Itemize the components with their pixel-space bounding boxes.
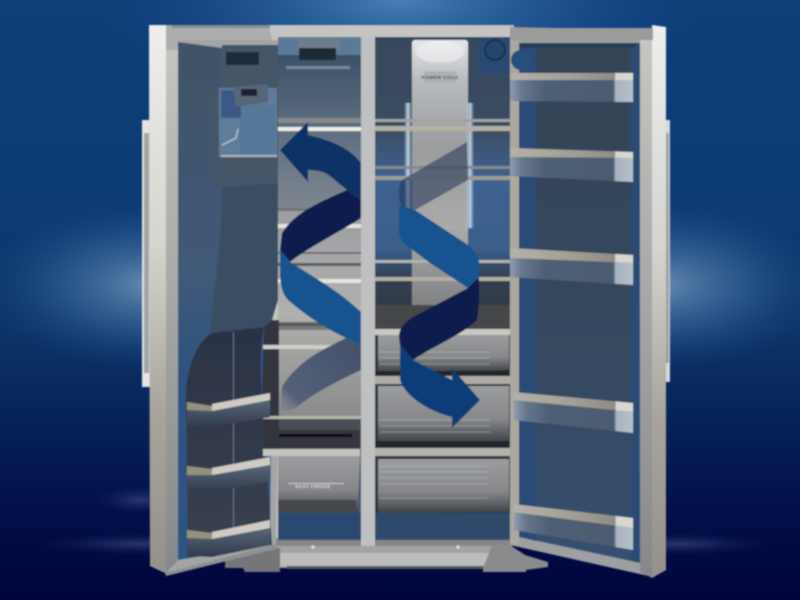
left door shelves xyxy=(187,393,270,557)
dark section xyxy=(399,277,479,360)
fridge shelves xyxy=(375,119,510,281)
right door handle strip xyxy=(664,120,670,382)
right door liner xyxy=(519,43,640,563)
center cold panel: POWER COLD xyxy=(421,75,459,81)
arrow head xyxy=(400,345,480,428)
center divider xyxy=(361,36,375,546)
left shelf 3 xyxy=(187,520,270,557)
liner right fold xyxy=(210,183,278,333)
interior rails seen past door edge xyxy=(263,345,279,456)
left door handle strip xyxy=(142,120,150,387)
inner door cavity xyxy=(186,327,272,557)
air vent circle xyxy=(478,38,510,74)
right airflow arrow xyxy=(399,142,480,428)
right door shelves xyxy=(510,73,633,550)
rear section fading xyxy=(280,338,361,412)
dark section xyxy=(280,190,361,262)
right shelf 3 xyxy=(510,248,633,285)
right shelf 4 xyxy=(513,392,633,433)
dispenser recess xyxy=(219,88,277,157)
left door xyxy=(149,25,279,576)
blue section xyxy=(280,250,361,345)
right shelf 2 xyxy=(510,148,633,182)
rear section xyxy=(399,142,468,210)
blue section xyxy=(399,205,479,288)
gap behind door edge xyxy=(262,320,279,450)
freezer compartment xyxy=(278,37,361,540)
fridge drawers xyxy=(375,329,510,540)
ice dispenser housing xyxy=(210,47,278,186)
door liner xyxy=(178,42,278,560)
left airflow arrow xyxy=(280,122,361,412)
left shelf 2 xyxy=(187,457,270,492)
arrow head xyxy=(280,122,361,200)
cabinet xyxy=(225,25,548,572)
right shelf 1 xyxy=(510,73,633,102)
drawer striations xyxy=(380,352,490,498)
right door xyxy=(510,25,666,578)
ice maker xyxy=(298,38,340,60)
center cold panel xyxy=(412,40,468,308)
fridge compartment xyxy=(375,37,510,540)
side lights xyxy=(404,103,474,228)
left shelf 1 xyxy=(187,393,270,427)
freezer drawer: EASY FREEZE xyxy=(295,484,331,489)
freezer shelves xyxy=(278,118,361,419)
freezer drawer xyxy=(278,430,360,513)
right shelf 5 xyxy=(513,504,633,550)
